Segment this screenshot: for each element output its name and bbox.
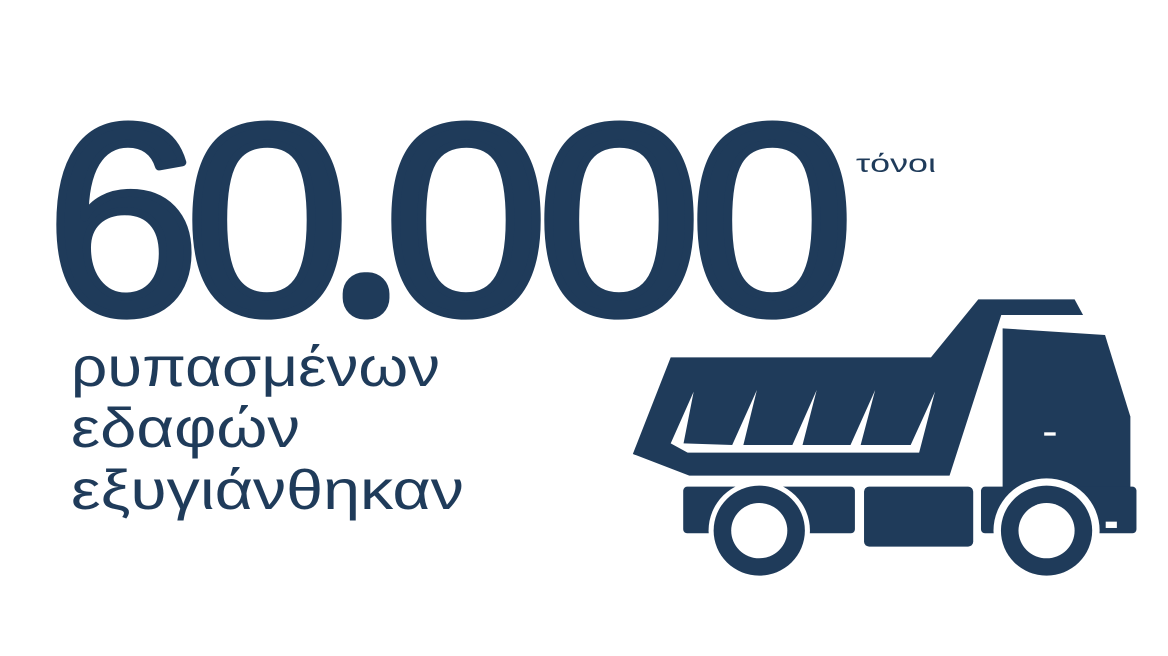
big number: 60.000 bbox=[46, 68, 854, 370]
front wheel bbox=[993, 478, 1100, 583]
truck tipper bed bbox=[633, 299, 1083, 476]
big number: 60.000: 0 bbox=[690, 68, 854, 370]
big number: 60.000: 0 bbox=[185, 68, 349, 370]
big number: 60.000: 6 bbox=[46, 68, 200, 370]
description text: εδαφών bbox=[71, 396, 300, 459]
tipper bed white slats bbox=[671, 390, 935, 453]
rear wheel bbox=[709, 481, 810, 581]
headlight bbox=[1106, 522, 1117, 528]
description text: εξυγιάνθηκαν bbox=[71, 458, 464, 521]
unit label: tonnes: τόνοι bbox=[856, 150, 936, 178]
rear chassis block bbox=[683, 487, 855, 533]
icon: dump truck bbox=[633, 299, 1136, 583]
truck cab bbox=[1003, 328, 1130, 493]
door handle bbox=[1044, 432, 1056, 436]
middle chassis block bbox=[864, 487, 973, 547]
description text bbox=[71, 335, 464, 521]
big number: 60.000: 0 bbox=[537, 68, 701, 370]
big number: 60.000: . bbox=[360, 263, 372, 307]
description text: ρυπασμένων bbox=[71, 335, 440, 398]
front chassis block bbox=[981, 487, 1136, 533]
big number: 60.000: 0 bbox=[384, 68, 548, 370]
